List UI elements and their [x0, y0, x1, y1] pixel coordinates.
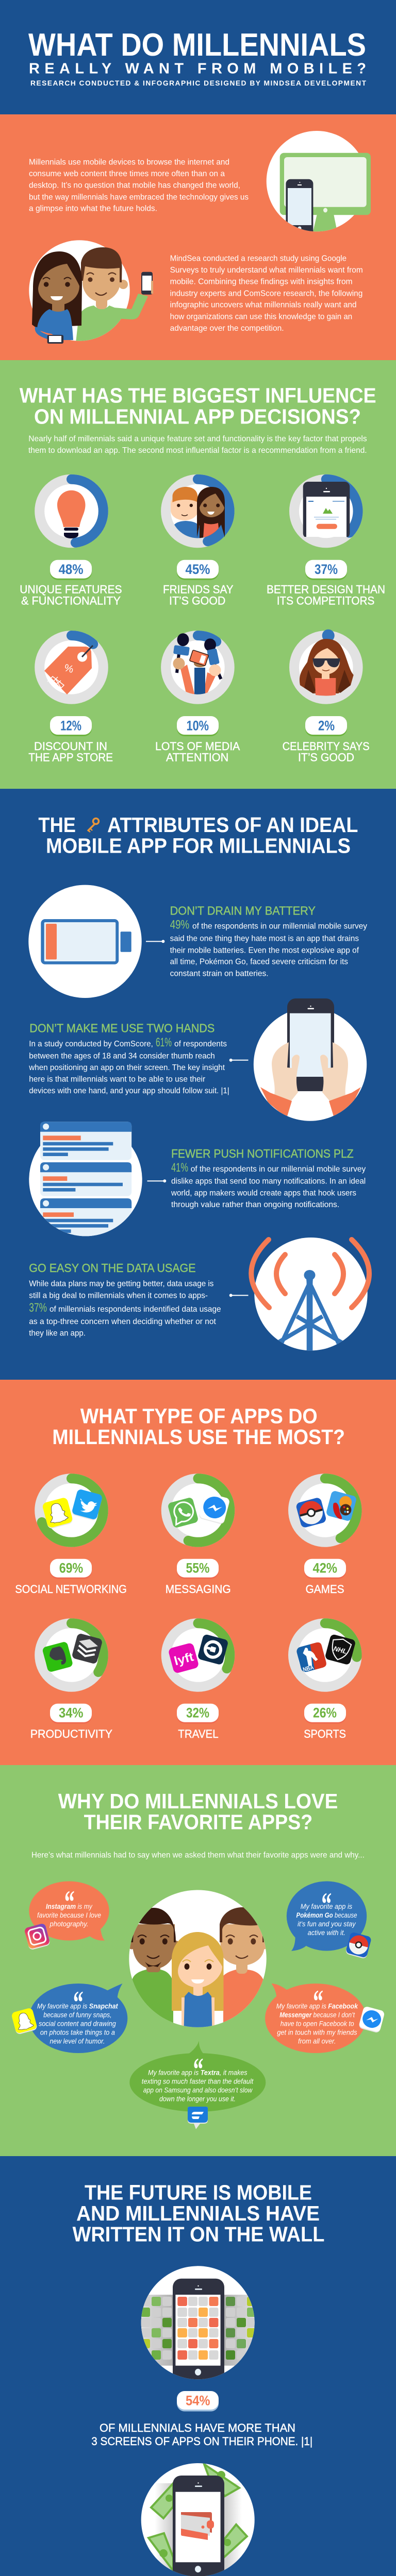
card three — [40, 1198, 131, 1240]
label: BETTER DESIGN THAN — [267, 583, 385, 596]
label: ATTENTION — [166, 751, 228, 764]
callout: pokemon go quote: My favorite app is — [301, 1903, 352, 1910]
section: favorite apps quotes — [0, 1765, 396, 2156]
callout: messenger quote: from all over. — [298, 2037, 336, 2045]
icon: messenger — [358, 2006, 385, 2033]
section: app types — [0, 1380, 396, 1765]
pill: 32% — [177, 1704, 219, 1724]
icon: nhl: NHL — [333, 1645, 348, 1655]
text block: notifications — [171, 1147, 366, 1209]
icon: nhl — [324, 1634, 356, 1665]
heading: WHY DO MILLENNIALS LOVE — [58, 1789, 338, 1813]
text block: data usage: 37% — [29, 1301, 47, 1315]
text block: notifications: FEWER PUSH NOTIFICATIONS PLZ — [171, 1147, 354, 1160]
pill: 42% — [304, 1559, 346, 1579]
text block: data usage: GO EASY ON THE DATA USAGE — [29, 1261, 196, 1275]
stat: discount 12% — [28, 636, 113, 764]
ring gauge — [293, 1623, 357, 1687]
icon: lyft — [168, 1642, 200, 1674]
icon: price tag: % — [63, 662, 75, 675]
heading: THEIR FAVORITE APPS? — [84, 1810, 312, 1834]
callout: textra quote: texting so much faster than the default — [142, 2077, 254, 2085]
ring gauge — [294, 630, 358, 699]
callout: messenger quote — [265, 1984, 385, 2053]
pill: 55%: 55% — [186, 1561, 209, 1576]
text block: one hand — [28, 1021, 229, 1095]
stat: better design 37% — [267, 479, 385, 607]
text block: data usage: of millennials respondents indentified data usage — [50, 1305, 221, 1314]
ring gauge — [293, 1479, 357, 1542]
icon: notification cards — [29, 1122, 142, 1240]
label: TRAVEL — [178, 1727, 219, 1740]
ring gauge — [166, 479, 229, 543]
text block: section intro — [28, 435, 367, 455]
icon: phone with app screens — [141, 2266, 255, 2379]
icon: uber — [197, 1634, 229, 1665]
heading — [73, 2180, 324, 2246]
icon: candy crush — [325, 1490, 357, 1522]
callout: textra quote — [129, 2041, 266, 2129]
icon: whatsapp — [167, 1497, 199, 1529]
pill: 54%: 54% — [186, 2393, 210, 2408]
stat: unique features 48% — [20, 479, 122, 607]
label: GAMES — [306, 1583, 344, 1596]
text block: one hand: 61% — [156, 1036, 172, 1049]
pill: 10%: 10% — [187, 718, 209, 733]
label: THE APP STORE — [28, 751, 113, 764]
ring gauge — [40, 1623, 103, 1687]
label — [163, 583, 234, 607]
icon: signal tower — [251, 1238, 369, 1354]
callout: pokemon go quote — [287, 1882, 372, 1959]
icon: pokemon go — [295, 1497, 327, 1529]
pill: 32%: 32% — [186, 1705, 209, 1721]
connector — [146, 940, 164, 943]
icon: hands holding phone — [254, 998, 367, 1121]
callout: textra quote: My favorite app is Textra, it makes — [148, 2069, 248, 2076]
callout: messenger quote: get in touch with my friends — [277, 2028, 357, 2036]
pill: 69%: 69% — [59, 1561, 83, 1576]
pill: 55% — [177, 1559, 219, 1579]
text block: one hand: DON’T MAKE ME USE TWO HANDS — [29, 1021, 214, 1035]
pill: 26% — [304, 1704, 346, 1724]
callout: instagram quote: photography. — [50, 1920, 88, 1928]
callout: instagram quote — [24, 1882, 109, 1951]
pill: 26%: 26% — [313, 1705, 337, 1721]
heading — [58, 1789, 338, 1834]
man — [76, 247, 153, 343]
woman — [32, 251, 82, 344]
text block: intro paragraph one — [29, 158, 249, 213]
text block: battery — [170, 904, 367, 978]
illustration: three friends — [127, 1890, 268, 2030]
text block: section intro: Here’s what millennials had to say when we asked them what their favorite apps were and why... — [31, 1851, 365, 1859]
callout: textra quote: app on Samsung and also doesn’t slow — [143, 2086, 253, 2094]
connector — [229, 1294, 249, 1297]
connector — [147, 1179, 166, 1182]
heading: THE FUTURE IS MOBILE — [85, 2180, 312, 2204]
heading — [38, 813, 358, 858]
pill: 37%: 37% — [315, 562, 338, 577]
icon: snapchat — [11, 2007, 38, 2035]
text block: intro paragraph one: desktop. It’s no question that mobile has changed the world, — [29, 181, 240, 190]
stat: productivity 34% — [30, 1623, 112, 1740]
text block: notifications: through value rather than ongoing notifications. — [171, 1200, 339, 1209]
text block: intro paragraph two — [170, 255, 363, 333]
callout: snapchat quote: social content and drawing — [39, 2020, 116, 2027]
pill: 2%: 2% — [318, 718, 335, 733]
left man — [130, 1908, 178, 2023]
text block: notifications: of the respondents in our millennial mobile survey — [191, 1165, 366, 1174]
heading: MILLENNIALS USE THE MOST? — [52, 1425, 345, 1449]
text block: battery: their mobile batteries. Even the most explosive app of — [170, 946, 359, 955]
text block: battery: all time, Pokémon Go, faced severe criticism for its — [170, 958, 348, 967]
right man — [220, 1907, 266, 2023]
text block: intro paragraph two: industry experts and ComScore research, the following — [170, 289, 362, 298]
icon: phone wallet and money — [141, 2463, 255, 2576]
text block: data usage — [29, 1261, 221, 1338]
label — [267, 583, 385, 607]
callout: snapchat quote: My favorite app is Snapchat — [37, 2002, 118, 2010]
ring gauge — [166, 1479, 230, 1542]
label: SPORTS — [304, 1727, 346, 1740]
heading: WRITTEN IT ON THE WALL — [73, 2223, 324, 2246]
ring gauge — [40, 1479, 103, 1542]
callout: instagram quote: “ — [64, 1885, 75, 1920]
icon: messenger — [199, 1492, 230, 1525]
pill: 37% — [305, 560, 347, 580]
label — [28, 740, 113, 764]
text block: battery: said the one thing they hate most is an app that drains — [170, 935, 359, 943]
callout: snapchat quote: because of funny snaps, — [43, 2011, 111, 2019]
card one — [40, 1122, 131, 1160]
callout: snapchat quote: new level of humor. — [50, 2037, 105, 2045]
stat: friends 45% — [163, 479, 234, 607]
label: DISCOUNT IN — [34, 740, 107, 753]
icon: evernote — [42, 1641, 73, 1673]
icon: buffer — [71, 1633, 103, 1665]
section: key attributes — [0, 789, 396, 1380]
card two — [40, 1162, 131, 1196]
callout: pokemon go quote: active with it. — [308, 1929, 345, 1937]
text block: intro paragraph one: a glimpse into what the future holds. — [29, 205, 157, 213]
text block: one hand: In a study conducted by ComScore, — [29, 1040, 153, 1048]
pill: 12% — [50, 716, 92, 736]
stat: celebrity 2% — [283, 630, 370, 764]
icon: phone with app screen — [303, 482, 350, 538]
section: app decision influences — [0, 360, 396, 789]
stat: travel 32% — [166, 1623, 230, 1740]
text block: intro paragraph two: infographic uncovers what millennials really want and — [170, 301, 357, 310]
heading: THE — [38, 813, 76, 837]
callout: snapchat quote: on photos take things to a — [40, 2028, 115, 2036]
heading: ATTRIBUTES OF AN IDEAL — [107, 813, 358, 837]
icon: key — [88, 818, 99, 832]
heading — [52, 1404, 345, 1449]
callout: snapchat quote — [11, 1984, 127, 2053]
icon: lyft: lyft — [173, 1650, 195, 1668]
text block: battery: DON’T DRAIN MY BATTERY — [170, 904, 316, 918]
icon: light bulb — [57, 490, 86, 538]
pill: 48% — [50, 560, 92, 580]
pill: 45%: 45% — [186, 562, 210, 577]
ring gauge — [40, 479, 103, 543]
icon: price tag — [44, 646, 93, 694]
section: future is mobile — [0, 2156, 396, 2576]
pill: 10% — [177, 716, 219, 736]
text block: intro paragraph two: MindSea conducted a research study using Google — [170, 255, 346, 263]
callout: pokemon go quote: it’s fun and you stay — [298, 1920, 356, 1928]
text block: intro paragraph one: Millennials use mobile devices to browse the internet and — [29, 158, 229, 166]
stat: messaging 55% — [166, 1479, 231, 1596]
connector — [229, 1059, 249, 1062]
ring gauge — [294, 479, 358, 543]
pill: 2% — [305, 716, 347, 736]
text block: one hand: when positioning an app on their screen. The key insight — [28, 1063, 225, 1072]
text block: data usage: they like an app. — [29, 1329, 86, 1338]
callout: textra quote: down the longer you use it. — [159, 2095, 236, 2103]
label: UNIQUE FEATURES — [20, 583, 122, 596]
text block: 54% statement: OF MILLENNIALS HAVE MORE THAN — [100, 2421, 295, 2434]
callout: snapchat quote: “ — [73, 1985, 84, 2020]
text block: intro paragraph one: but the way millennials have embraced the technology gives us — [29, 193, 249, 201]
label — [283, 740, 370, 764]
icon: pokemon go — [345, 1931, 372, 1959]
text block: intro paragraph two: Surveys to truly understand what millennials want from — [170, 266, 363, 275]
icon: nba — [295, 1641, 327, 1674]
text block: one hand: between the ages of 18 and 34 consider thumb reach — [29, 1052, 215, 1060]
callout: messenger quote: “ — [313, 1984, 323, 2019]
pill: 34%: 34% — [59, 1705, 84, 1721]
text block: section intro: Nearly half of millennials said a unique feature set and functionality is the key factor that propels — [28, 435, 367, 444]
label — [155, 740, 240, 764]
callout: messenger quote: My favorite app is Facebook — [276, 2002, 358, 2010]
callout: pokemon go quote: “ — [321, 1887, 332, 1922]
heading: MOBILE APP FOR MILLENNIALS — [46, 834, 351, 858]
icon: low battery — [28, 885, 142, 998]
icon: celebrity with sunglasses — [300, 639, 354, 696]
stat: sports 26% — [293, 1623, 357, 1740]
text block: section intro: them to download an app. The second most influential factor is a recommendation from a friend. — [28, 446, 367, 455]
callout: instagram quote: Instagram is my — [46, 1903, 93, 1910]
callout: messenger quote: Messenger because I don’t — [279, 2011, 355, 2019]
text block: notifications: world, app makers would create apps that hook users — [171, 1189, 356, 1197]
text block: notifications: 41% — [171, 1161, 188, 1175]
illustration: couple with phones — [29, 240, 153, 344]
text block: battery: 49% — [170, 918, 189, 932]
pill: 45% — [177, 560, 219, 580]
icon: snapchat — [42, 1497, 74, 1530]
subtitle: REALLY WANT FROM MOBILE? — [29, 61, 366, 77]
title: WHAT DO MILLENNIALS — [28, 27, 366, 63]
heading: ON MILLENNIAL APP DECISIONS? — [34, 404, 361, 428]
label: ITS COMPETITORS — [277, 594, 374, 607]
icon: reporters microphones — [173, 633, 221, 696]
stat: social networking 69% — [15, 1479, 127, 1596]
callout: instagram quote: favorite because I love — [37, 1911, 101, 1919]
pill: 34% — [50, 1704, 92, 1724]
ring gauge — [40, 636, 103, 699]
text block: one hand: here is that millennials want to be able to use their — [29, 1075, 206, 1084]
section: header — [0, 0, 396, 114]
wallet — [181, 2512, 214, 2540]
text block: one hand: devices with one hand, and your app should follow suit. |1| — [29, 1087, 229, 1095]
text block: 54% statement — [91, 2421, 312, 2448]
text block: battery: of the respondents in our millennial mobile survey — [192, 922, 367, 931]
section: introduction — [0, 114, 396, 360]
callout: textra quote: “ — [193, 2052, 203, 2087]
text block: data usage: still a big deal to millennials when it comes to apps- — [29, 1291, 208, 1300]
text block: one hand: of respondents — [174, 1040, 227, 1048]
text block: intro paragraph two: mobile. Combining these findings with insights from — [170, 278, 353, 286]
byline: RESEARCH CONDUCTED & INFOGRAPHIC DESIGNED BY MINDSEA DEVELOPMENT — [30, 79, 367, 87]
icon: desktop monitor and phone — [267, 131, 371, 241]
text block: intro paragraph two: how organizations can use this knowledge to gain an — [170, 312, 352, 321]
label: MESSAGING — [166, 1583, 231, 1596]
pill: 48%: 48% — [59, 562, 84, 577]
label: & FUNCTIONALITY — [21, 594, 121, 607]
heading: WHAT TYPE OF APPS DO — [80, 1404, 318, 1428]
icon: two friends — [171, 487, 225, 541]
text block: data usage: While data plans may be getting better, data usage is — [29, 1280, 213, 1289]
text block: intro paragraph two: advantage over the competition. — [170, 324, 284, 333]
stat: media attention 10% — [155, 633, 240, 764]
pill: 54% — [177, 2391, 219, 2411]
label: CELEBRITY SAYS — [283, 740, 370, 753]
label: IT’S GOOD — [169, 594, 225, 607]
text block: intro paragraph one: consume web content three times more often than on a — [29, 170, 225, 178]
icon: textra — [188, 2107, 208, 2129]
text block: notifications: dislike apps that send too many notifications. In an ideal — [171, 1177, 366, 1186]
icon: instagram — [24, 1923, 51, 1951]
text block: data usage: as a top-three concern when deciding whether or not — [29, 1317, 216, 1326]
callout: pokemon go quote: Pokémon Go because — [296, 1911, 357, 1919]
heading: AND MILLENNIALS HAVE — [76, 2201, 320, 2225]
text block: battery: constant strain on batteries. — [170, 969, 269, 978]
icon: nba: NBA — [302, 1664, 315, 1673]
ring gauge — [166, 1623, 230, 1687]
heading — [20, 384, 376, 428]
pill: 12%: 12% — [60, 718, 81, 733]
pill: 69% — [50, 1559, 92, 1579]
label: PRODUCTIVITY — [30, 1727, 112, 1740]
callout: messenger quote: have to open Facebook to — [280, 2020, 354, 2027]
pill: 42%: 42% — [312, 1561, 337, 1576]
label: FRIENDS SAY — [163, 583, 234, 596]
stat: games 42% — [293, 1479, 357, 1596]
woman — [172, 1932, 224, 2030]
money bills — [148, 2464, 247, 2571]
label: LOTS OF MEDIA — [155, 740, 240, 753]
ring gauge — [166, 636, 229, 699]
label — [20, 583, 122, 607]
text block: 54% statement: 3 SCREENS OF APPS ON THEIR PHONE. |1| — [91, 2435, 312, 2448]
icon: twitter — [71, 1488, 103, 1521]
label: IT’S GOOD — [298, 751, 354, 764]
label: SOCIAL NETWORKING — [15, 1583, 127, 1596]
